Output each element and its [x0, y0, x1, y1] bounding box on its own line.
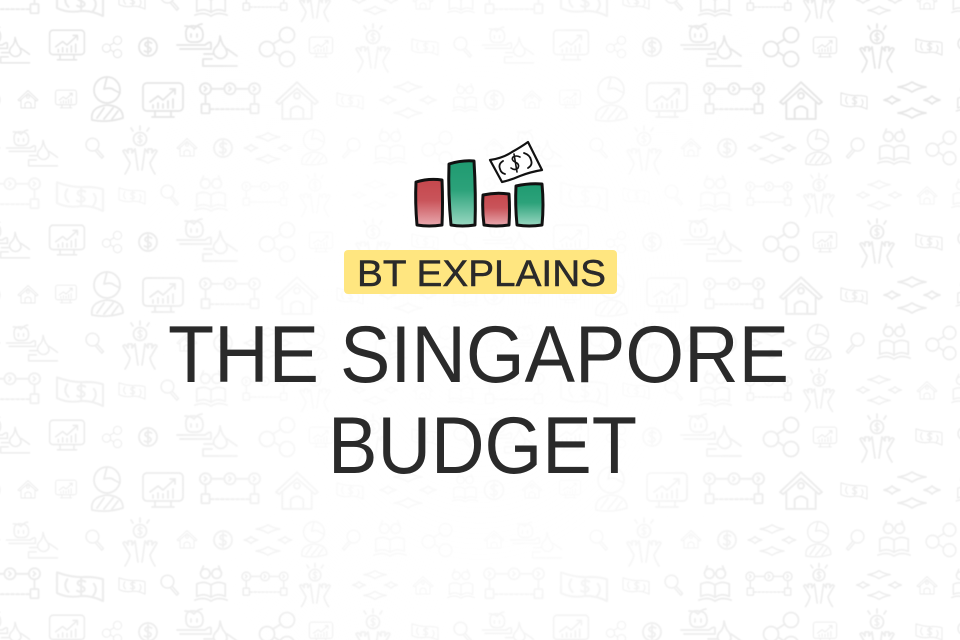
title: [168, 310, 789, 491]
green bar one: [449, 161, 475, 226]
green bar two: [516, 184, 543, 226]
title line one: THE SINGAPORE: [168, 310, 789, 400]
logo: bar chart with banknote: [416, 142, 543, 226]
title line two: BUDGET: [328, 401, 637, 491]
badge: BT Explains: BT EXPLAINS: [357, 252, 606, 294]
banknote: [490, 142, 542, 182]
red bar one: [416, 179, 442, 226]
red bar two: [483, 193, 510, 226]
